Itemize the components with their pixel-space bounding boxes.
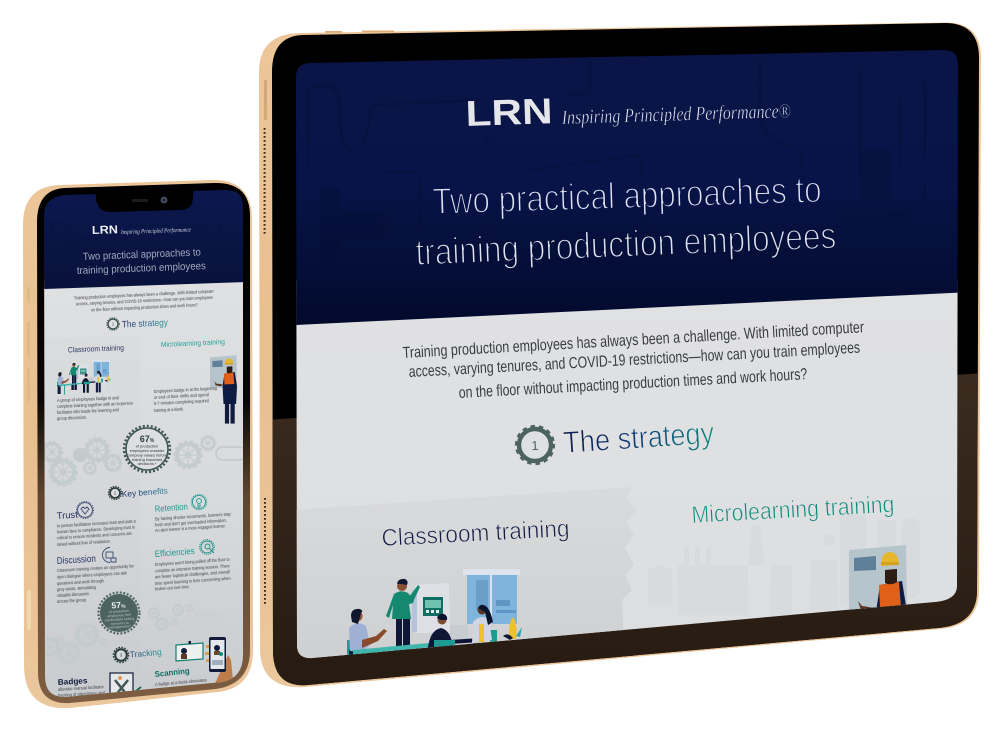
phone classroom text [57, 395, 133, 421]
phone scanning text: the facilitator's burden and makes [155, 683, 218, 693]
phone solid gear blob [73, 448, 87, 462]
phone 67 percent stat gear: of production [136, 444, 158, 448]
phone efficiencies icon [200, 540, 214, 554]
tablet title [415, 169, 837, 273]
phone title [77, 247, 206, 277]
phone intro text [74, 289, 214, 312]
tablet intro text: access, varying tenures, and COVID-19 restrictions—how can you train employees [408, 340, 861, 381]
tablet top buttons [325, 30, 394, 33]
phone discussion text: Classroom training creates an opportunity for [57, 563, 134, 573]
large grey gear backdrop [296, 510, 634, 658]
phone discussion heading: Discussion [56, 554, 96, 567]
faint header pipework [307, 60, 926, 192]
tablet numbered gear icon [515, 425, 555, 465]
phone efficiencies text: time spent learning is less concerning when [155, 576, 231, 586]
tablet heading: classroom training: Classroom training [381, 515, 570, 552]
phone retention icon [191, 494, 207, 510]
tablet heading: microlearning training: Microlearning training [691, 491, 895, 529]
tablet title: training production employees [415, 215, 837, 273]
phone screen [40, 186, 250, 705]
phone faint pipework [52, 210, 220, 280]
phone speaker and camera [132, 197, 167, 203]
phone trust icon [76, 502, 94, 518]
phone trust text: critical to ensure incidents and concerns are [57, 531, 132, 540]
phone scanning text [155, 668, 207, 688]
phone gear backdrop tint [44, 335, 140, 700]
phone worker illustration [210, 355, 237, 424]
phone heading: tracking: Tracking [129, 647, 162, 659]
phone notch [93, 188, 196, 212]
phone 57 percent stat gear: of production [109, 609, 129, 614]
phone badge graphic [176, 641, 203, 661]
tablet bezel [272, 23, 979, 686]
phone 57 percent stat gear: 57% [111, 600, 126, 610]
phone title: Two practical approaches to [83, 247, 201, 263]
phone trust heading: Trust [56, 509, 78, 521]
phone badges text: alleviate manual facilitator [58, 684, 104, 692]
phone 57 percent stat gear [98, 592, 140, 634]
phone heading: microlearning training: Microlearning training [161, 337, 225, 349]
phone microlearning text: Employees badge in at the beginning [154, 386, 217, 394]
tablet screen [290, 40, 970, 692]
phone microlearning text [154, 386, 217, 413]
phone microlearning text: training at a kiosk. [154, 406, 184, 413]
phone retention text: By having shorter increments, learners stay [155, 511, 232, 521]
phone discussion text: across the group. [57, 597, 87, 604]
phone gear 3 icon [113, 647, 129, 663]
phone heading: classroom training: Classroom training [68, 343, 124, 354]
phone large pale gear [178, 610, 232, 664]
phone 57 percent stat gear: concerns to [111, 621, 129, 626]
phone badges text: Badges [58, 676, 88, 687]
phone tagline: Inspiring Principled Performance [120, 227, 191, 236]
phone discussion text: open dialogue where employees can ask [57, 570, 128, 579]
phone gear 2 icon: 2 [114, 491, 117, 496]
tablet numbered gear icon: 1 [531, 438, 539, 453]
phone discussion text: grey areas, stimulating [57, 585, 96, 592]
phone trust text: In-person facilitation increases trust and puts a [57, 519, 136, 528]
phone classroom text: group discussion. [57, 415, 87, 421]
phone classroom text: A group of employees badge in and [57, 395, 119, 403]
tablet intro text: on the floor without impacting production times and work hours? [458, 366, 808, 402]
phone 57 percent stat gear: management.* [108, 624, 132, 630]
phone bezel [37, 183, 250, 703]
phone intro text: access, varying tenures, and COVID-19 restrictions—how can you train employees [76, 295, 214, 306]
phone gold body [23, 180, 253, 708]
phone efficiencies text: Employees aren't being pulled off the floor to [155, 557, 230, 567]
phone 67 percent stat gear: decisions.* [138, 461, 157, 466]
phone heading: key benefits: Key benefits [121, 485, 168, 499]
phone 57 percent stat gear: comfortable raising [105, 616, 134, 623]
phone scanning text: A badge at a kiosk eliminates [155, 677, 208, 687]
phone trust text [57, 519, 136, 547]
phone discussion icon [102, 548, 116, 562]
tablet heading: the strategy: The strategy [562, 416, 716, 460]
phone background gears [40, 436, 215, 664]
phone discussion text [57, 563, 134, 604]
phone classroom text: facilitator who leads the learning and [57, 407, 119, 415]
phone gear 1 icon [107, 318, 119, 330]
phone efficiencies text: are fewer logistical challenges, and overall [155, 569, 230, 579]
phone device [23, 180, 253, 708]
phone efficiencies text: complete an intensive training session. There [155, 563, 230, 573]
phone 67 percent stat gear [124, 426, 170, 472]
phone efficiencies heading: Efficiencies [154, 546, 195, 559]
phone hand and smartphone graphic [205, 637, 233, 683]
tablet device [250, 22, 1000, 720]
tablet intro text: Training production employees has always been a challenge. With limited computer [402, 319, 865, 362]
phone microlearning text: or end of their shifts and spend [154, 392, 209, 400]
phone header band [40, 186, 246, 289]
phone gear 2 icon [108, 486, 122, 500]
phone side buttons [27, 287, 31, 630]
phone intro text: Training production employees has always been a challenge. With limited computer [74, 289, 214, 300]
phone gear 1 icon: 1 [112, 322, 115, 327]
faint header machinery [320, 150, 910, 258]
faint factory silhouettes [770, 614, 792, 617]
classroom illustration [347, 569, 522, 655]
phone heading: the strategy: The strategy [122, 316, 168, 329]
phone retention heading: Retention [154, 501, 188, 514]
phone efficiencies text [155, 557, 231, 591]
phone efficiencies text: broken out over time. [155, 584, 190, 591]
tablet header band [290, 40, 970, 325]
phone scanning text: Scanning [154, 666, 190, 679]
phone 67 percent stat gear: employees consider [130, 448, 165, 453]
tablet title: Two practical approaches to [432, 169, 822, 222]
phone conveyor belt [216, 447, 246, 460]
tablet tagline: Inspiring Principled Performance® [561, 100, 791, 129]
phone 57 percent stat gear: employees feel [107, 613, 131, 618]
phone 67 percent stat gear: training important [132, 457, 163, 462]
phone retention text: fresh and don't get overloaded information. [155, 518, 227, 527]
phone 67 percent stat gear: company values before [127, 452, 167, 458]
phone light body [40, 280, 250, 705]
phone microlearning text: 5-7 minutes completing required [154, 398, 209, 406]
phone classroom illustration [57, 360, 111, 395]
phone trust text: human face to compliance. Developing trust is [57, 525, 136, 534]
tablet intro text [402, 319, 865, 402]
tablet gold body [259, 22, 981, 687]
phone retention text [155, 511, 232, 533]
phone discussion text: valuable discussion [57, 591, 89, 598]
phone classroom text: complete training together with an in-person [57, 401, 133, 409]
phone gear 3 icon: 3 [120, 653, 123, 658]
phone badges text: tracking of attendance and [58, 690, 105, 698]
phone intro text: on the floor without impacting production times and work hours? [91, 302, 198, 312]
screen light body [290, 280, 970, 670]
phone retention text: An alert learner is a more engaged learner. [155, 523, 226, 533]
phone title: training production employees [77, 261, 206, 277]
phone 67 percent stat gear: 67% [140, 434, 155, 444]
worker illustration [849, 545, 907, 610]
phone trust text: raised without fear of retaliation. [57, 539, 111, 547]
phone LRN logo: LRN [92, 224, 118, 237]
phone discussion text: questions and work through [57, 578, 104, 586]
phone tracking icon badge [109, 672, 142, 693]
tablet LRN logo: LRN [465, 90, 553, 134]
tablet side button and speaker grilles [264, 80, 267, 605]
phone badges text [58, 678, 105, 697]
